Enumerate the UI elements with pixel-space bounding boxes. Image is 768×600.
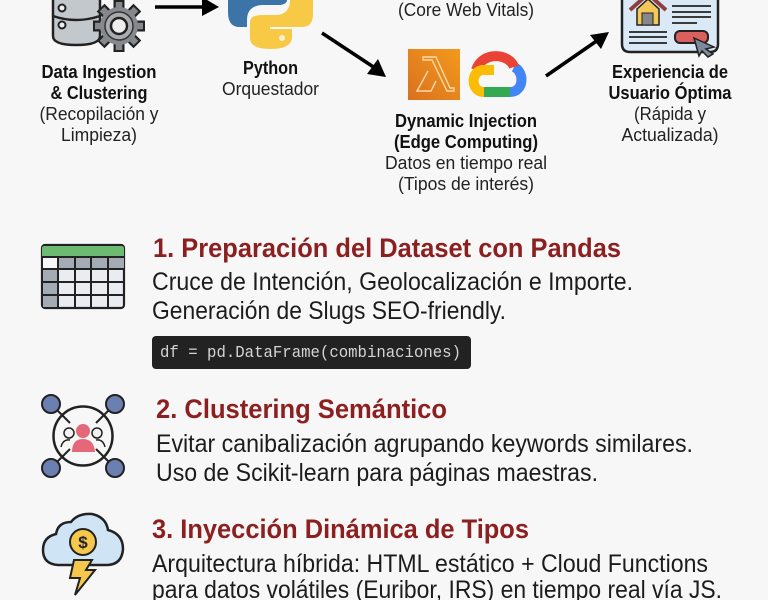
text: python: Python [243,58,298,78]
text: dynamic injection: (Tipos de interés) [398,174,534,194]
text: python: Orquestador [222,79,319,99]
section 1: preparación del dataset: 1. Preparación del Dataset con Pandas [153,233,621,263]
text: data ingestion: & Clustering [50,83,148,103]
section 2: clustering semántico: 2. Clustering Semántico [156,394,447,424]
text: experiencia: (Rápida y [634,104,706,124]
icon: semantic cluster network [42,395,124,477]
text: python [222,58,319,99]
section 3: inyección dinámica [152,514,722,600]
icon: cloud with dollar and lightning [43,514,123,595]
text: core web vitals: (Core Web Vitals) [398,0,534,20]
text: data ingestion: (Recopilación y [40,104,158,124]
text: data ingestion: Limpieza) [61,125,137,145]
text: experiencia: Actualizada) [622,125,718,145]
text: dynamic injection: Dynamic Injection [395,111,537,131]
code block: df = pd.DataFrame(combinaciones) [160,344,461,363]
arrow: python to edge [322,33,386,77]
arrow: ingestion to python [155,0,219,16]
text: data ingestion: Data Ingestion [42,62,156,82]
icon: table [42,245,124,308]
text: experiencia: Usuario Óptima [608,82,732,103]
icon: database and gear [53,0,145,52]
arrow: edge to experience [546,32,609,76]
section 3: inyección dinámica: Arquitectura híbrida: HTML estático + Cloud Functions [152,550,708,578]
section 3: inyección dinámica: 3. Inyección Dinámica de Tipos [152,514,529,544]
text: experiencia [608,62,732,145]
section 1: preparación del dataset [152,233,633,325]
section 2: clustering semántico [156,394,693,487]
section 2: clustering semántico: Uso de Scikit-learn para páginas maestras. [156,459,598,487]
text: dynamic injection [385,111,547,194]
icon: aws lambda [408,49,460,100]
text: dynamic injection: (Edge Computing) [394,132,538,152]
icon: cloud with dollar and lightning: $ [78,533,88,552]
text: data ingestion [40,62,158,145]
text: dynamic injection: Datos en tiempo real [385,153,547,173]
code block [152,336,471,369]
section 1: preparación del dataset: Generación de Slugs SEO-friendly. [152,297,506,325]
icon: python logo [228,0,313,49]
section 1: preparación del dataset: Cruce de Intención, Geolocalización e Importe. [152,268,633,296]
icon: web page with house and cursor [622,0,718,57]
section 2: clustering semántico: Evitar canibalización agrupando keywords similares. [156,430,693,458]
icon: google cloud [474,56,521,92]
text: experiencia: Experiencia de [612,62,728,82]
